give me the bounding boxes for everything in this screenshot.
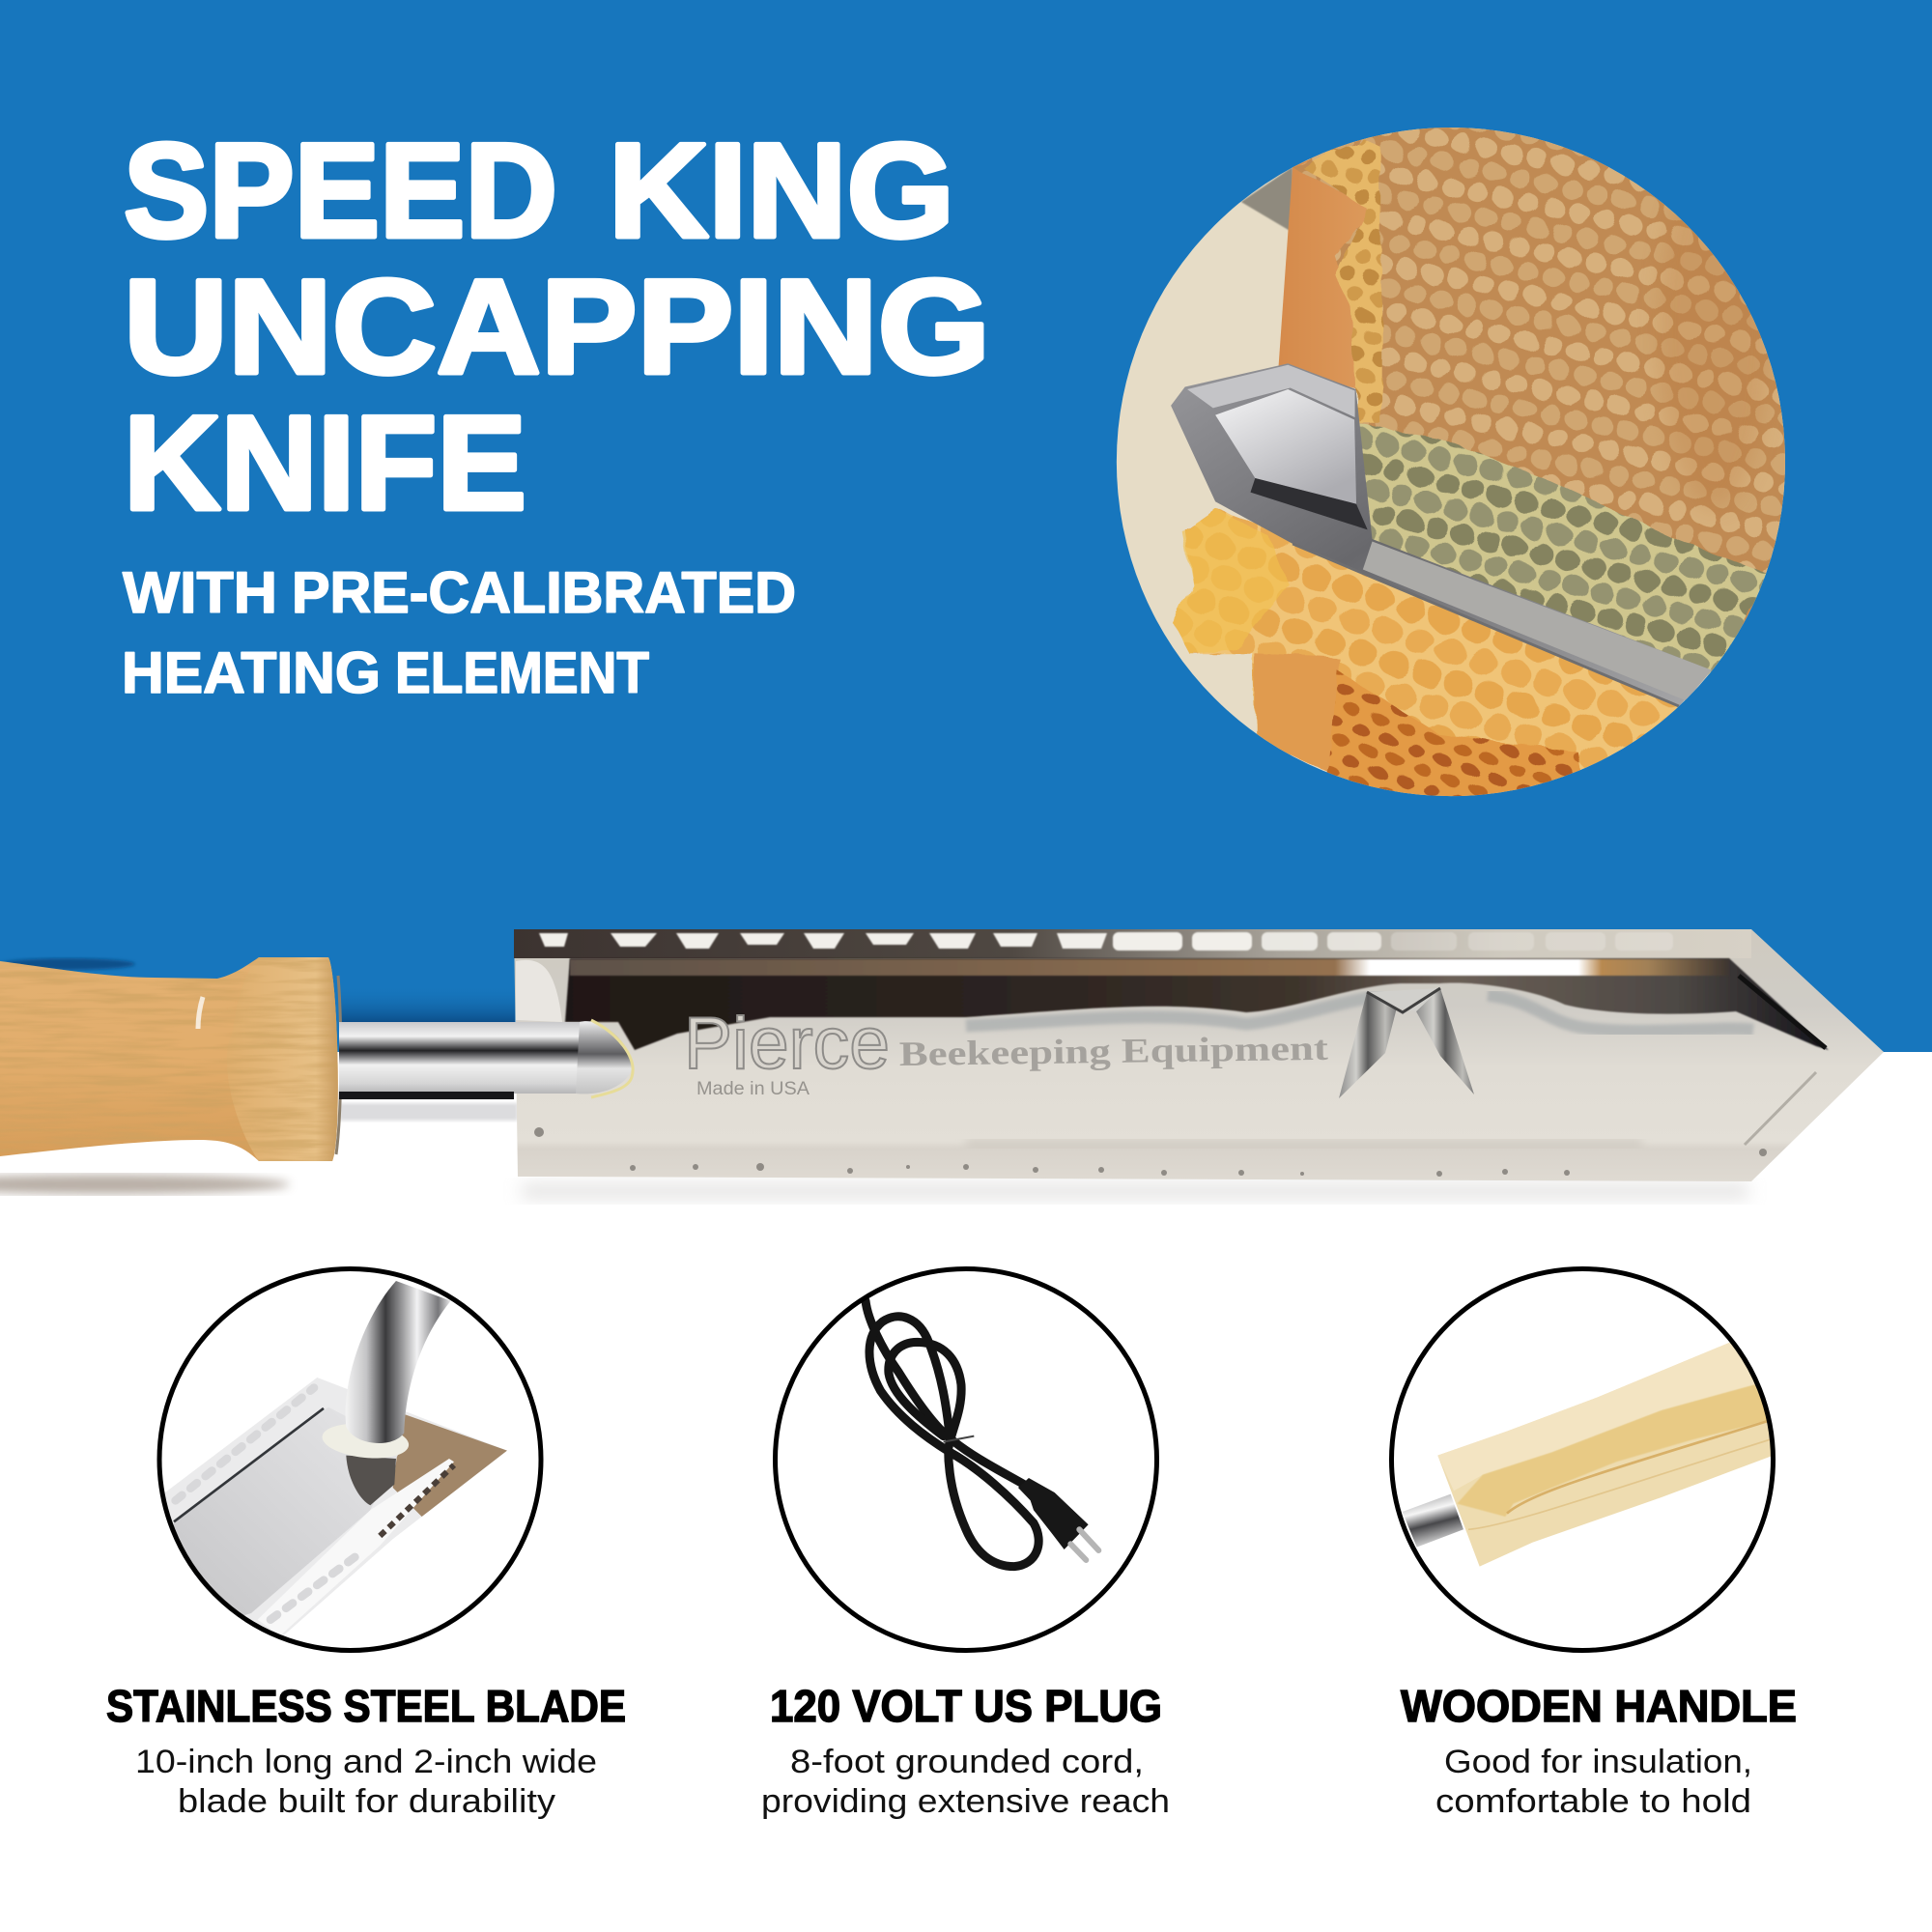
inner bevel right <box>1739 976 1826 1048</box>
ground shadows <box>0 1103 1748 1198</box>
lower soft reflection <box>966 1140 1642 1148</box>
lower stud marks <box>534 1127 1767 1177</box>
wave reflection <box>966 995 1753 1031</box>
title: SPEED <box>124 116 557 266</box>
feature: 120 volt US plug <box>761 1269 1170 1820</box>
circular photo: power cord <box>866 1301 1098 1567</box>
description <box>135 1744 597 1820</box>
dark reflection band <box>565 958 1829 1050</box>
circular photo: pine handle <box>1403 1336 1777 1567</box>
circle outline <box>1391 1269 1774 1650</box>
description <box>1435 1744 1752 1820</box>
description: comfortable to hold <box>1435 1783 1751 1820</box>
title: KING <box>609 116 954 266</box>
soft shadow on blue <box>0 958 515 1022</box>
heading: WOODEN HANDLE <box>1401 1681 1797 1731</box>
subtitle <box>122 560 796 705</box>
rod <box>339 1020 633 1099</box>
description: providing extensive reach <box>761 1783 1170 1820</box>
knife tip in photo <box>1171 363 1712 706</box>
description: Good for insulation, <box>1444 1744 1752 1780</box>
feature: wooden handle <box>1391 1269 1797 1820</box>
rivet clip <box>1339 992 1397 1098</box>
circle outline <box>775 1269 1157 1650</box>
description <box>761 1744 1170 1820</box>
description: 8-foot grounded cord, <box>790 1744 1144 1780</box>
heading: STAINLESS STEEL BLADE <box>106 1681 626 1731</box>
subtitle: PRE-CALIBRATED <box>292 560 796 625</box>
brand: Made in USA: Made in USA <box>696 1079 810 1099</box>
photo: knife cutting honeycomb <box>1110 120 1794 809</box>
brand: Beekeeping Equipment: Beekeeping Equipment <box>899 1029 1328 1073</box>
wooden handle <box>0 957 341 1161</box>
steel blade <box>514 929 1884 1181</box>
hammered top rim <box>514 929 1751 958</box>
brand: Pierce: Pierce <box>684 1003 890 1085</box>
circle outline <box>159 1269 541 1650</box>
title <box>124 116 990 538</box>
subtitle: ELEMENT <box>395 640 649 705</box>
description: 10-inch long and 2-inch wide <box>135 1744 597 1780</box>
knife hero product <box>0 929 1884 1198</box>
blue background panel <box>0 0 1932 1052</box>
title: KNIFE <box>124 388 526 538</box>
circular photo: blade close-up <box>161 1281 507 1642</box>
subtitle: WITH <box>123 560 277 625</box>
left edge <box>516 960 562 1022</box>
feature: stainless steel blade <box>106 1269 626 1820</box>
heading: 120 VOLT US PLUG <box>770 1681 1162 1731</box>
title: UNCAPPING <box>124 252 990 402</box>
subtitle: HEATING <box>122 640 381 705</box>
description: blade built for durability <box>178 1783 555 1820</box>
